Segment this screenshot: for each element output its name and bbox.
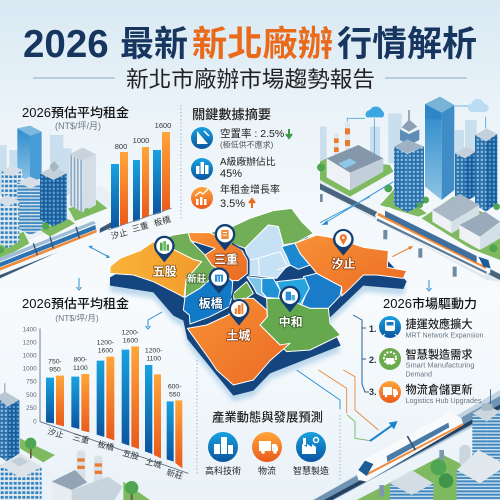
bar chart: lower rent by district: 五股	[121, 448, 140, 462]
icon: rent growth	[191, 187, 213, 209]
bar chart: lower rent by district: 1200-	[97, 340, 114, 347]
arrows: connectors around map	[76, 278, 432, 329]
bar chart: lower rent by district: 600-	[168, 383, 182, 390]
district: blue	[262, 278, 280, 298]
bar chart: lower rent by district: 1200	[23, 339, 37, 346]
district: 新莊	[153, 233, 218, 297]
map labels: 三重	[214, 251, 238, 266]
district: cyan	[277, 278, 309, 305]
divider: key data	[180, 105, 182, 220]
heading: industry trends: 產業動態與發展預測	[212, 410, 323, 424]
district: 五股	[110, 242, 202, 297]
district: mid blue	[282, 243, 310, 269]
pin: 板橋	[209, 267, 229, 294]
driver 3: logistics: 3.	[369, 387, 377, 397]
title: 最新	[120, 25, 188, 64]
heading: market drivers: 2026市場驅動力	[383, 296, 477, 311]
pin: 五股	[154, 236, 175, 262]
driver 2: smart manufacturing: Smart Manufacturing	[406, 362, 475, 370]
icon labels: 高科技術	[205, 465, 241, 476]
driver 3: logistics: Logistics Hub Upgrades	[406, 398, 482, 405]
map labels: 新莊	[187, 273, 207, 285]
title: 新北廠辦	[192, 25, 333, 64]
bar chart: top rent: 1000	[133, 136, 149, 145]
heading: top rent chart: 2026預估平均租金	[22, 105, 130, 120]
district: small green	[233, 282, 253, 299]
driver 2: smart manufacturing	[369, 348, 475, 378]
bar chart: lower rent by district: 950	[49, 366, 61, 373]
text: grade A share: 45%	[220, 168, 242, 180]
bar chart: lower rent by district: 800-	[73, 356, 87, 363]
bar chart: lower rent by district: 500	[26, 392, 37, 399]
text: vacancy rate: 空置率 : 2.5%	[220, 127, 284, 140]
scene: lower-right train and buildings	[313, 389, 500, 500]
district: light cyan	[247, 277, 267, 298]
bar chart: lower rent by district: 1000	[23, 353, 37, 360]
map labels: 汐止	[331, 256, 355, 271]
bar chart: top rent: 800	[115, 142, 127, 151]
driver 2: smart manufacturing: 智慧製造需求	[406, 348, 472, 362]
heading: lower rent chart: 2026預估平均租金	[22, 296, 130, 311]
text: rent growth: 年租金增長率	[220, 183, 280, 196]
bar chart: lower rent by district: 1600	[123, 338, 138, 345]
bar chart: top rent: 1600	[155, 121, 171, 130]
bar chart: lower rent by district: 三重	[72, 432, 90, 446]
map labels: 土城	[226, 327, 250, 342]
bar chart: lower rent by district: 1600	[98, 348, 113, 355]
driver 2: smart manufacturing: 2.	[369, 355, 377, 365]
heading: lower rent chart	[22, 296, 130, 323]
pin: 汐止	[333, 229, 354, 256]
map labels: 板橋	[199, 295, 223, 310]
text: rent growth: 3.5%	[220, 198, 245, 210]
bar chart: lower rent by district: 汐止	[46, 426, 65, 440]
bar chart: lower rent by district	[23, 326, 188, 481]
bar chart: lower rent by district: 板橋	[96, 439, 116, 453]
district: 板橋	[183, 273, 233, 324]
icon labels: 智慧製造	[293, 465, 329, 476]
bar chart: lower rent by district: 土城	[144, 456, 163, 470]
district: 土城	[187, 298, 290, 385]
text: grade A share	[220, 155, 276, 180]
text: grade A share: A級廠辦佔比	[220, 155, 276, 168]
heading: lower rent chart: (NT$/坪/月)	[55, 313, 99, 323]
scene: upper-left city and train	[0, 126, 113, 278]
scene: lower-left buildings and factory	[0, 383, 150, 500]
map labels: 五股	[153, 264, 177, 278]
text: rent growth	[220, 183, 280, 210]
map labels	[153, 251, 355, 342]
driver 1: MRT	[369, 316, 484, 340]
district: north green	[210, 208, 313, 248]
panel: key data summary	[191, 106, 292, 210]
scene: upper-right city, factory and train	[317, 97, 500, 282]
text: vacancy rate	[220, 127, 292, 150]
driver 3: logistics: 物流倉儲更新	[406, 382, 472, 396]
driver 2: smart manufacturing: Demand	[406, 372, 432, 378]
icon: smart manufacturing	[296, 432, 326, 462]
driver 1: MRT: 捷運效應擴大	[406, 317, 472, 331]
bar chart: top rent	[108, 121, 172, 241]
pin: 中和	[280, 286, 300, 312]
heading: top rent chart: (NT$/坪/月)	[55, 121, 101, 131]
driver 1: MRT: 1.	[369, 324, 377, 334]
heading: top rent chart	[22, 105, 130, 131]
bar chart: lower rent by district: 1200-	[122, 330, 139, 337]
district: east blue	[302, 273, 342, 308]
pin: 三重	[215, 224, 235, 251]
bar chart: top rent: 板橋	[153, 214, 172, 228]
district: 中和	[260, 298, 341, 352]
panel: 2026 market drivers	[353, 296, 484, 405]
district: 汐止	[295, 235, 407, 296]
title: 行情解析	[337, 25, 477, 64]
heading: key data: 關鍵數據摘要	[192, 106, 271, 122]
text: vacancy rate: (極低供不應求)	[220, 140, 274, 150]
bar chart: lower rent by district: 新莊	[165, 467, 184, 481]
driver 3: logistics	[369, 381, 482, 405]
icon labels	[205, 465, 329, 476]
bar chart: lower rent by district: 550	[169, 392, 181, 399]
bar chart: top rent: 汐止	[110, 227, 129, 241]
panel: industry trends and outlook	[197, 360, 340, 480]
bar chart: lower rent by district: 1100	[73, 365, 88, 372]
subtitle: 新北市廠辦市場趨勢報告	[126, 67, 375, 92]
title: 2026	[23, 23, 109, 66]
district: central light blue	[245, 225, 292, 278]
bar chart: lower rent by district: 750	[26, 379, 37, 386]
bar chart: lower rent by district: 0	[33, 418, 37, 425]
icon: logistics	[252, 432, 282, 462]
bar chart: lower rent by district: 1200-	[145, 347, 162, 354]
bar chart: lower rent by district: 750-	[48, 358, 62, 365]
bar chart: top rent: 三重	[131, 220, 150, 234]
bar chart: lower rent by district: 250	[26, 405, 37, 412]
arrows: routed lines to train	[297, 370, 398, 441]
bar chart: lower rent by district: 1000	[23, 366, 37, 373]
icon: high tech	[208, 432, 238, 462]
pin: 土城	[229, 299, 249, 326]
district: 三重	[188, 233, 247, 281]
bar chart: lower rent by district: 1400	[23, 326, 37, 333]
driver 1: MRT: MRT Network Expansion	[406, 332, 484, 340]
icon labels: 物流	[258, 465, 276, 476]
title	[23, 23, 477, 66]
map labels: 中和	[279, 314, 303, 329]
icon: grade A	[191, 158, 213, 180]
map of New Taipei districts	[110, 208, 407, 402]
icon: vacancy	[191, 127, 213, 149]
bar chart: lower rent by district: 1100	[146, 356, 161, 363]
